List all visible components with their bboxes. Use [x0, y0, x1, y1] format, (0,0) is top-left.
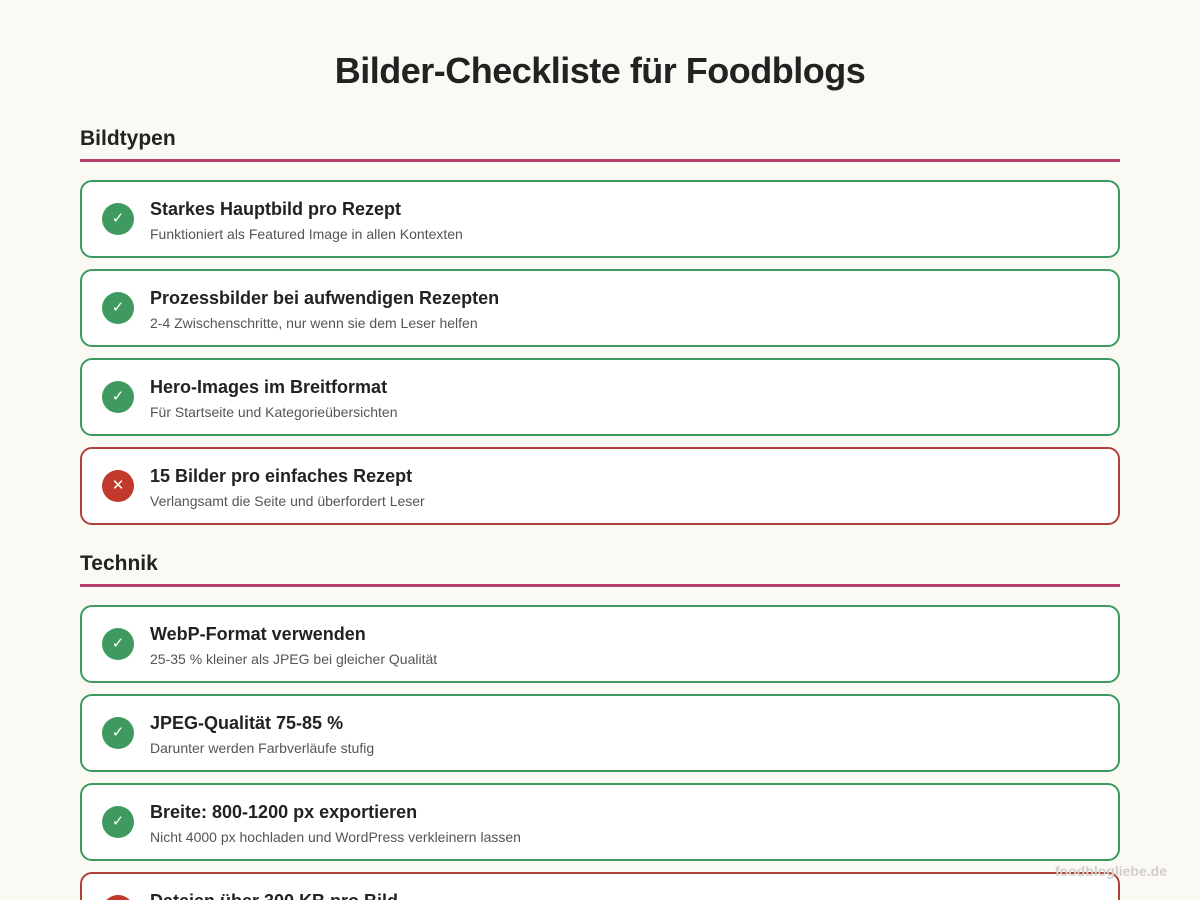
- heading: Technik: [80, 552, 1120, 587]
- heading: Bildtypen: Bildtypen: [80, 127, 176, 150]
- card: Hauptbild: Funktioniert als Featured Image in allen Kontexten: [150, 226, 463, 242]
- card: Hauptbild: [80, 180, 1120, 258]
- card: WebP: WebP-Format verwenden: [150, 624, 366, 644]
- heading: Technik: Technik: [80, 552, 158, 575]
- card: 15 Bilder: Verlangsamt die Seite und überfordert Leser: [150, 493, 425, 509]
- title: Bilder-Checkliste für Foodblogs: [335, 50, 865, 91]
- card: WebP: 25-35 % kleiner als JPEG bei gleicher Qualität: [150, 651, 437, 667]
- card: WebP: [80, 605, 1120, 683]
- card: Hero-Images: Für Startseite und Kategorieübersichten: [150, 404, 397, 420]
- watermark: foodblogliebe.de: [1055, 863, 1167, 879]
- card: Hero-Images: ✓: [112, 388, 124, 405]
- heading: Bildtypen: [80, 127, 1120, 162]
- card: Breite: [80, 783, 1120, 861]
- card: Prozessbilder: 2-4 Zwischenschritte, nur wenn sie dem Leser helfen: [150, 315, 478, 331]
- card: Breite: Nicht 4000 px hochladen und WordPress verkleinern lassen: [150, 829, 521, 845]
- card: Breite: Breite: 800-1200 px exportieren: [150, 802, 417, 822]
- card: 15 Bilder: [80, 447, 1120, 525]
- card: Dateien: [80, 872, 1120, 900]
- card: Hero-Images: Hero-Images im Breitformat: [150, 377, 387, 397]
- card: 15 Bilder: 15 Bilder pro einfaches Rezept: [150, 466, 412, 486]
- card: Prozessbilder: [80, 269, 1120, 347]
- card: JPEG: ✓: [112, 724, 124, 741]
- card: JPEG: Darunter werden Farbverläufe stufig: [150, 740, 374, 756]
- card: Prozessbilder: ✓: [112, 299, 124, 316]
- card: Breite: ✓: [112, 813, 124, 830]
- card: Prozessbilder: Prozessbilder bei aufwendigen Rezepten: [150, 288, 499, 308]
- card: JPEG: [80, 694, 1120, 772]
- card: Hero-Images: [80, 358, 1120, 436]
- card: JPEG: JPEG-Qualität 75-85 %: [150, 713, 343, 733]
- card: WebP: ✓: [112, 635, 124, 652]
- card: 15 Bilder: ✕: [112, 477, 124, 494]
- card: Hauptbild: ✓: [112, 210, 124, 227]
- card: Hauptbild: Starkes Hauptbild pro Rezept: [150, 199, 401, 219]
